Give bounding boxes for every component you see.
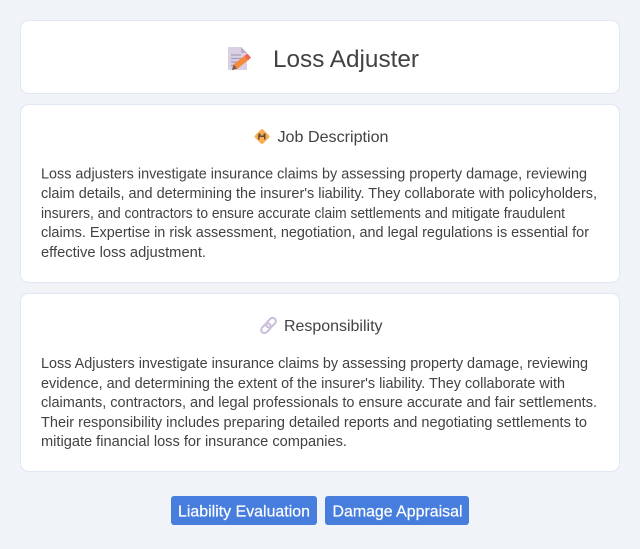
panel: title [20,20,620,94]
heading: Job Description: Job Description [278,129,388,146]
text: responsibility body [41,356,597,450]
tag: Damage Appraisal: Damage Appraisal [332,504,462,520]
text: job description body [41,166,597,261]
text: responsibility body: Their responsibility includes preparing detailed reports and negotiating settlements to [41,415,587,431]
icon: chain link [260,317,277,334]
icon: orange diamond sign [254,128,270,145]
text: job description body: claim details, and determining the insurer's liability. They collaborate with policyholders, [41,186,597,202]
text: responsibility body: mitigate financial loss for insurance companies. [41,434,347,450]
text: responsibility body: Loss Adjusters investigate insurance claims by assessing property damage, reviewing [41,356,588,372]
tag: Damage Appraisal [325,496,469,525]
tag: Liability Evaluation [171,496,317,525]
text: responsibility body: claimants, contractors, and legal professionals to ensure accurate and fair settlements. [41,395,597,411]
heading: Responsibility: Responsibility [284,318,382,335]
text: job description body: claims. Expertise in risk assessment, negotiation, and legal regulations is essential for [41,225,589,241]
text: job description body: effective loss adjustment. [41,245,206,261]
text: job description body: Loss adjusters investigate insurance claims by assessing property damage, reviewing [41,166,587,182]
text: responsibility body: evidence, and determining the extent of the insurer's liability. They collaborate with [41,376,565,392]
icon: document with pencil [228,47,251,70]
panel: job description [20,104,620,282]
panel: responsibility [20,294,620,472]
heading: Loss Adjuster: Loss Adjuster [273,46,419,73]
text: job description body: insurers, and contractors to ensure accurate claim settlements and mitigate fraudulent [41,206,565,222]
tag: Liability Evaluation: Liability Evaluation [178,504,310,520]
